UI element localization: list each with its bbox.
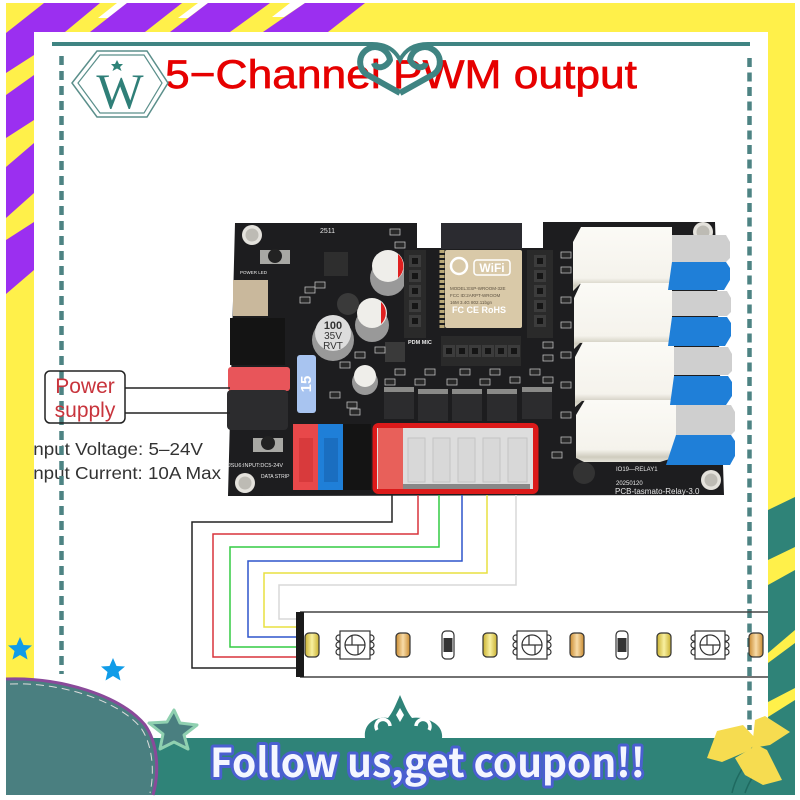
bottom banner <box>150 738 795 795</box>
esp32 wifi module: FCC ID:2ARPT-WROOM <box>450 293 501 298</box>
strip power connectors <box>293 424 371 490</box>
capacitors <box>312 250 406 395</box>
relay modules <box>573 227 676 462</box>
mounting holes <box>235 222 721 493</box>
led strip <box>296 612 768 677</box>
module gold pins <box>440 250 444 330</box>
left pin header <box>404 250 426 338</box>
silkscreen labels: 2511 <box>320 228 335 235</box>
esp32 wifi module: 16M 3.4G 802.11bgn <box>450 300 492 305</box>
input specifications text: Input Voltage: 5–24V <box>28 439 203 459</box>
capacitors: 100 <box>324 320 342 332</box>
frame dashed side lines <box>62 56 750 730</box>
output wires <box>192 495 516 668</box>
outlined star <box>149 710 197 749</box>
esp32 wifi module: MODEL:ESP-WROOM-32E <box>450 286 506 291</box>
silkscreen labels: 20250120 <box>616 481 643 487</box>
esp32 wifi module <box>445 250 522 328</box>
relay terminal connectors <box>666 235 735 465</box>
board body <box>228 222 724 496</box>
store logo <box>72 51 168 119</box>
controller circuit board <box>227 222 735 496</box>
power supply box: Power <box>55 375 115 398</box>
mosfets <box>384 387 552 421</box>
banner call to action: Follow us,get coupon!! <box>210 731 645 789</box>
input specifications text <box>28 439 221 483</box>
teal dome corner <box>6 679 157 795</box>
power supply box: supply <box>55 399 116 422</box>
inductor and chip <box>324 252 405 362</box>
wifi antenna area <box>441 223 522 249</box>
blue star center <box>101 658 125 680</box>
silkscreen labels: DATA STRIP <box>261 474 290 480</box>
capacitors: RVT <box>323 341 343 352</box>
silkscreen labels: JSU6:INPUT:DC5-24V <box>228 463 283 469</box>
ginkgo leaves <box>707 716 790 793</box>
power supply box <box>45 371 230 423</box>
silkscreen labels: POWER LED <box>240 270 268 275</box>
right pin header <box>527 250 553 338</box>
small components <box>300 229 571 458</box>
silkscreen labels: PDM MIC <box>408 340 432 346</box>
blue fuse <box>297 355 316 413</box>
blue fuse: 15 <box>298 376 315 392</box>
frame top rule and ornament <box>52 44 750 93</box>
usb-c port <box>233 280 268 316</box>
silkscreen labels: IO19—RELAY1 <box>616 467 658 473</box>
blue star left <box>8 637 32 660</box>
title: 5−Channel PWM output <box>165 53 637 97</box>
buttons <box>253 249 290 452</box>
silkscreen labels <box>228 228 700 496</box>
capacitors: 35V <box>324 331 342 342</box>
power input connector <box>227 318 290 430</box>
esp32 wifi module: WiFi <box>479 261 505 275</box>
lower pin header <box>441 336 521 366</box>
highlighted pwm output terminals <box>372 423 538 494</box>
ir receiver <box>573 462 595 484</box>
store logo: W <box>96 63 144 119</box>
bottom center ornament <box>365 695 442 738</box>
silkscreen labels: PCB-tasmato-Relay-3.0 <box>615 487 700 496</box>
esp32 wifi module: FC CE RoHS <box>452 305 506 315</box>
input specifications text: Input Current: 10A Max <box>28 463 221 483</box>
